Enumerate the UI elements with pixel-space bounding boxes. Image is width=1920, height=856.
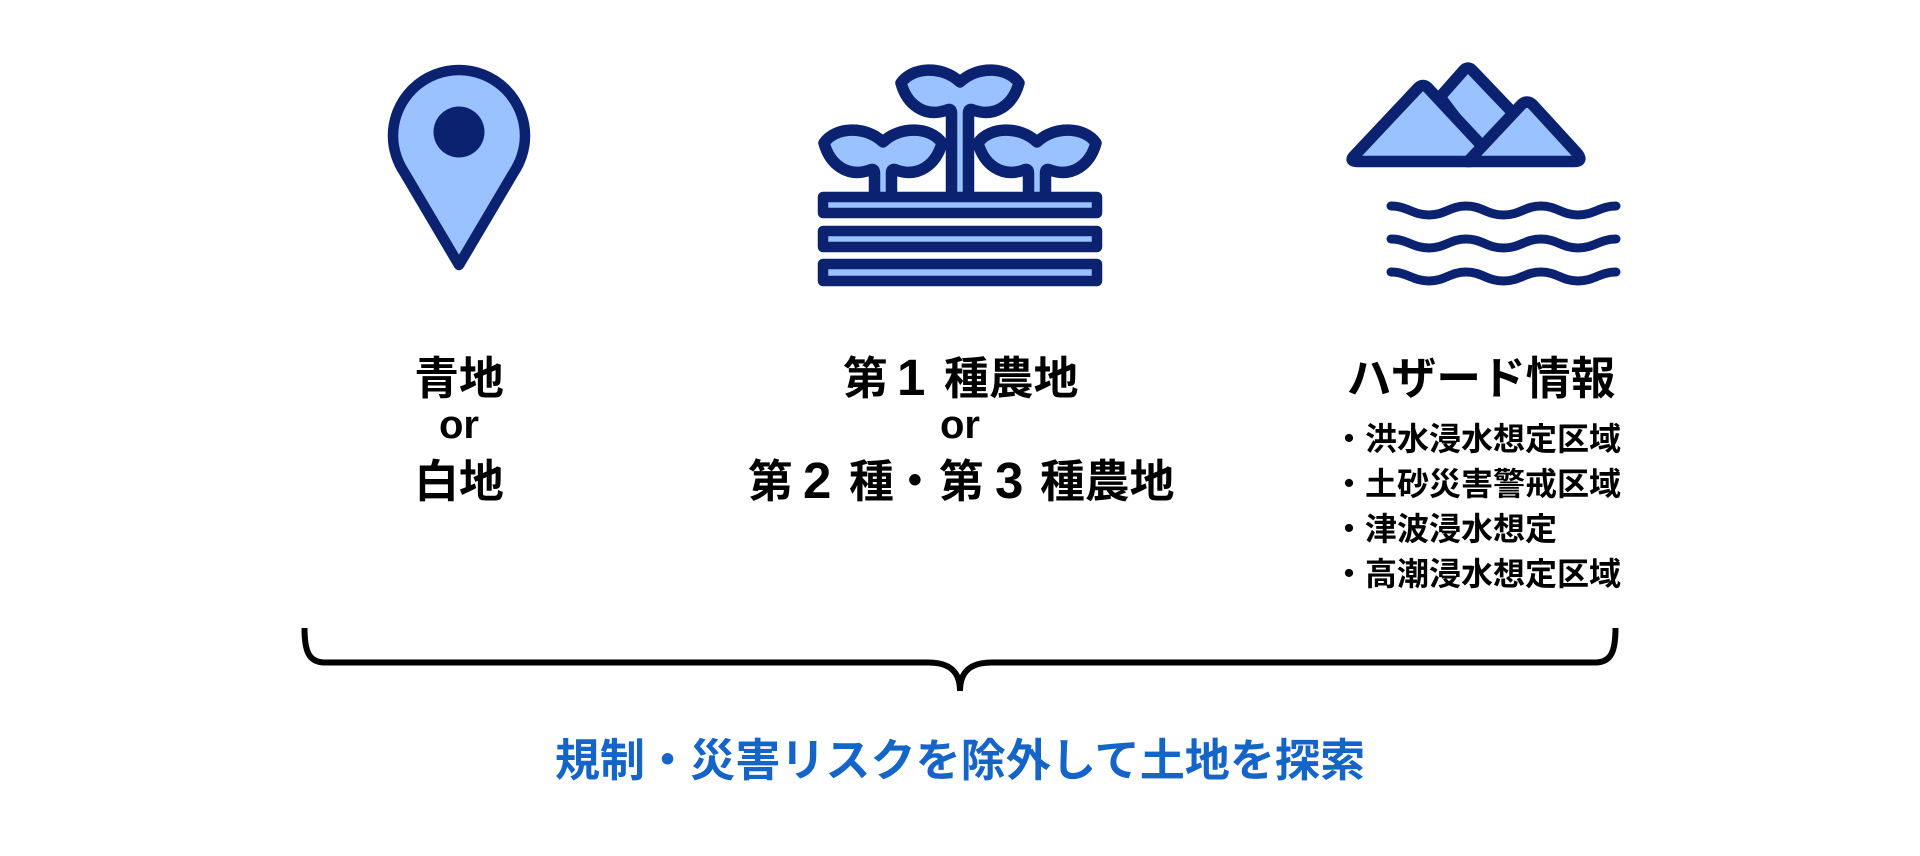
text block: hazard information: ハザード情報 xyxy=(1347,354,1616,404)
text block: farmland: 種農地 xyxy=(944,354,1078,404)
text block: farmland xyxy=(748,349,1174,509)
text block: farmland: 2 xyxy=(803,452,831,509)
right sprout xyxy=(978,130,1096,195)
text block: zoning: 青地 xyxy=(414,354,504,404)
icon: map pin xyxy=(393,70,525,265)
text block: farmland: 種 xyxy=(849,457,894,507)
text block: farmland: 第 xyxy=(939,457,984,507)
hazard list: ・洪水浸水想定区域 xyxy=(1333,421,1621,457)
soil rows xyxy=(823,197,1097,281)
left sprout xyxy=(824,130,942,195)
text block: zoning xyxy=(414,354,504,507)
text block: farmland: 1 xyxy=(897,349,925,406)
center sprout xyxy=(901,70,1019,195)
water waves xyxy=(1391,206,1616,281)
hazard list: ・土砂災害警戒区域 xyxy=(1333,466,1621,502)
text block: farmland: 第 xyxy=(748,457,793,507)
conclusion caption: 規制・災害リスクを除外して土地を探索 xyxy=(555,735,1365,786)
mountains xyxy=(1352,68,1580,162)
hazard list: ・高潮浸水想定区域 xyxy=(1333,556,1621,592)
icon: mountains and water xyxy=(1352,68,1616,281)
text block: zoning: or xyxy=(439,403,479,447)
text block: zoning: 白地 xyxy=(414,457,504,507)
text block: farmland: 種農地 xyxy=(1040,457,1174,507)
text block: farmland: 第 xyxy=(843,354,888,404)
icon: sprouts on farmland xyxy=(823,70,1097,281)
text block: farmland: 3 xyxy=(995,452,1023,509)
text block: farmland: ・ xyxy=(892,457,937,507)
hazard list: ・津波浸水想定 xyxy=(1333,511,1557,547)
hazard list xyxy=(1333,421,1621,592)
curly brace xyxy=(304,628,1616,691)
text block: farmland: or xyxy=(940,403,980,447)
text block: hazard information xyxy=(1333,354,1621,592)
